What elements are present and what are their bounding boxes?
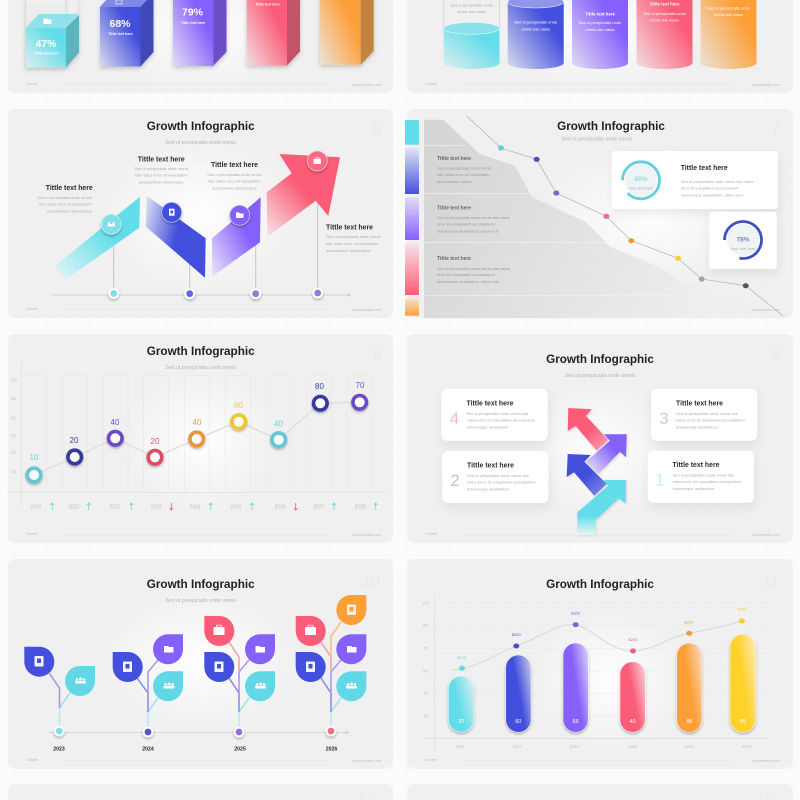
card 3: Tittle text here xyxy=(676,400,723,408)
arrow: blue xyxy=(567,454,607,496)
card 3: 3 xyxy=(659,409,669,428)
cylinder pink: Tittle text here xyxy=(650,2,680,6)
card 3 xyxy=(651,389,757,441)
cylinder orange: Sed ut perspiciatis unde xyxy=(707,6,751,10)
card 3: natus error sit voluptatem accusantium xyxy=(676,418,745,423)
pill values xyxy=(458,719,746,725)
arrow: pink xyxy=(568,408,608,451)
card 4: doloremque laudantium xyxy=(466,424,509,430)
year labels: 2021 xyxy=(68,504,80,510)
footer: Growth xyxy=(26,307,38,311)
text block 3: Tittle text here xyxy=(211,162,258,169)
y axis labels xyxy=(422,600,430,718)
trend line xyxy=(467,116,783,316)
slide number: 10 xyxy=(362,573,380,590)
icon badge: folder xyxy=(230,205,250,225)
cylinder orange xyxy=(700,0,756,69)
year 2024 leaves xyxy=(113,634,183,701)
y axis labels: 40 xyxy=(423,691,428,696)
ribbon: purple xyxy=(212,197,261,277)
text block 1: accusantium doloremque xyxy=(47,208,92,214)
text block 3 xyxy=(207,162,262,190)
footer xyxy=(26,758,381,763)
card 2: 2 xyxy=(450,471,460,490)
value labels: 80 xyxy=(315,382,324,391)
card 1 xyxy=(648,451,754,503)
heading: Growth Infographic xyxy=(557,120,665,133)
cube 68%: Tittle text here xyxy=(108,32,133,36)
year labels: 2025 xyxy=(234,746,246,752)
cube 79%: Tittle text here xyxy=(181,21,205,25)
arrow: purple xyxy=(586,434,627,474)
cube 47% xyxy=(26,0,79,68)
ribbon: teal xyxy=(55,197,140,280)
text block 4: Sed ut perspiciatis unde omnis xyxy=(326,234,380,239)
slide number: 7 xyxy=(772,122,781,139)
footer xyxy=(26,307,381,312)
year labels: 2020 xyxy=(30,504,41,510)
text block 4: iste natus error sit voluptatem xyxy=(326,241,379,246)
cube 47%: 47% xyxy=(35,38,57,50)
text block 1 xyxy=(37,185,93,214)
footer: Growth xyxy=(26,532,38,536)
year labels: 2021 xyxy=(628,744,638,749)
card 2: doloremque laudantium xyxy=(467,486,509,492)
text block 2: accusantium doloremque xyxy=(139,180,184,184)
text block 3: iste natus error sit voluptatem xyxy=(208,179,261,184)
footer: www.website.com xyxy=(751,759,780,763)
cylinder pink: omnis iste natus xyxy=(650,18,679,22)
icon badge: document xyxy=(162,202,182,222)
year labels xyxy=(30,504,366,510)
year labels xyxy=(53,746,337,752)
pill values: 60 xyxy=(515,719,521,725)
card: 88%: error sit voluptatem accusantium xyxy=(681,186,739,191)
subheading: Sed ut perspiciatis unde omnis xyxy=(565,373,636,379)
value labels: 20 xyxy=(70,436,79,445)
pill values: 40 xyxy=(630,719,636,725)
cylinder teal: omnis iste natus xyxy=(457,9,486,14)
text block 2 xyxy=(134,156,189,184)
step text 1: Tittle text here xyxy=(437,156,471,162)
footer xyxy=(425,532,780,537)
panel: slide 11 pill bar chart xyxy=(407,559,793,769)
card: 88%: Sed ut perspiciatis unde omnis iste natus xyxy=(681,179,753,184)
y axis labels: 100 xyxy=(10,378,18,382)
cube 68%: 68% xyxy=(109,18,131,30)
card 4: 4 xyxy=(450,409,459,428)
price labels xyxy=(457,606,747,660)
timeline dots xyxy=(108,288,323,299)
text block 2: iste natus error sit voluptatem xyxy=(135,173,188,178)
footer: www.website.com xyxy=(352,83,381,87)
card 1: Sed ut perspiciatis unde omnis iste xyxy=(672,472,735,478)
slide number: 8 xyxy=(373,347,382,364)
card 2: Tittle text here xyxy=(467,462,514,470)
y axis labels: 80 xyxy=(423,623,428,628)
timeline axis xyxy=(52,294,350,296)
cylinder pink xyxy=(636,0,692,69)
cube 68% xyxy=(100,0,154,66)
cylinder blue: omnis iste natus xyxy=(521,26,550,32)
value labels: 60 xyxy=(234,401,243,410)
panel: next slide left, cropped xyxy=(8,784,393,800)
footer: Growth xyxy=(425,758,437,762)
year labels: 2024 xyxy=(569,744,579,749)
arrow: pink xyxy=(267,154,340,237)
cube pink xyxy=(247,0,300,66)
card 2: Sed ut perspiciatis unde omnis iste xyxy=(467,473,530,478)
footer: Growth xyxy=(26,758,38,762)
card 1: doloremque laudantium xyxy=(672,486,715,491)
footer: www.website.com xyxy=(352,533,381,537)
timeline dots xyxy=(54,726,337,738)
card: 78%: Your text here xyxy=(731,246,756,251)
pill values: 30 xyxy=(458,719,464,725)
year labels: 2023 xyxy=(684,744,694,749)
cylinder purple: omnis iste natus xyxy=(586,27,614,32)
year labels: 2023 xyxy=(53,746,65,752)
icon badge: team xyxy=(101,214,121,234)
year labels: 2021 xyxy=(455,744,465,749)
value labels: 70 xyxy=(356,381,365,390)
card 1: Tittle text here xyxy=(672,462,720,469)
text block 1: iste natus error sit voluptatem xyxy=(39,202,92,207)
axes xyxy=(7,363,388,508)
year labels xyxy=(455,744,752,749)
card 4: Tittle text here xyxy=(466,400,514,408)
year labels: 2022 xyxy=(109,504,121,510)
text block 2: Tittle text here xyxy=(138,156,185,164)
cylinder orange: omnis iste natus xyxy=(714,12,743,17)
card 4: natus error sit voluptatem accusantium xyxy=(466,418,536,423)
subheading: Sed ut perspiciatis unde omnis xyxy=(165,140,236,146)
y axis labels: 40 xyxy=(11,433,16,438)
slide number: 9 xyxy=(772,347,781,364)
y axis labels: 60 xyxy=(423,668,428,674)
value labels: 40 xyxy=(274,420,283,428)
panel: next slide right, cropped xyxy=(407,784,793,800)
text block 4: Tittle text here xyxy=(326,224,373,232)
heading: Growth Infographic xyxy=(546,578,654,591)
heading: Growth Infographic xyxy=(546,353,654,366)
value labels: 20 xyxy=(151,437,160,446)
card: 78% xyxy=(709,212,777,269)
price labels: $300 xyxy=(571,610,581,616)
card 4: Sed ut perspiciatis unde omnis iste xyxy=(466,411,529,416)
footer: Growth xyxy=(26,82,38,86)
card: 88%: Your text here xyxy=(629,186,654,190)
year labels: 2022 xyxy=(512,744,522,749)
card: 88% xyxy=(612,151,778,209)
heading: Growth Infographic xyxy=(147,345,255,358)
footer xyxy=(26,532,381,537)
slide number: 6 xyxy=(373,122,382,139)
subheading: Sed ut perspiciatis unde omnis xyxy=(165,598,236,604)
pill values: 65 xyxy=(573,719,579,725)
colour bars xyxy=(405,120,419,316)
y axis labels: 80 xyxy=(11,396,16,401)
card 4 xyxy=(441,389,548,441)
icon badge: briefcase xyxy=(307,151,327,171)
panel: slide 9 arrow cards xyxy=(407,334,793,543)
year 2023 leaves xyxy=(24,647,95,696)
value labels: 40 xyxy=(193,418,202,427)
y axis labels xyxy=(10,378,18,474)
timeline axis xyxy=(49,731,348,734)
price labels: $100 xyxy=(457,655,467,660)
cube 79% xyxy=(173,0,226,66)
footer: Growth xyxy=(425,532,437,536)
text block 3: accusantium doloremque xyxy=(212,186,258,190)
value labels: 10 xyxy=(30,453,39,462)
year 2025 leaves xyxy=(204,616,275,701)
cube 47%: Tittle text here xyxy=(34,52,59,56)
y axis labels: 100 xyxy=(422,600,430,606)
card: 88%: Tittle text here xyxy=(681,165,728,172)
subheading: Sed ut perspiciatis unde omnis xyxy=(165,365,236,371)
price labels: $200 xyxy=(685,620,694,624)
trend dots xyxy=(459,618,745,671)
y axis labels: 20 xyxy=(11,450,16,455)
value labels xyxy=(30,381,365,462)
cylinder purple: Tittle text here xyxy=(585,12,616,16)
footer: www.website.com xyxy=(352,308,381,312)
footer xyxy=(425,82,780,87)
trend dots xyxy=(498,145,749,288)
stems xyxy=(114,200,318,290)
cylinder pink: Sed ut perspiciatis unde xyxy=(643,11,687,16)
step text 1: iste natus error sit voluptatem xyxy=(437,172,490,177)
value labels: 40 xyxy=(111,418,120,427)
year labels: 2026 xyxy=(326,746,337,752)
year labels: 2024 xyxy=(742,744,752,749)
cylinder blue xyxy=(508,0,564,69)
cylinder teal xyxy=(444,0,500,69)
heading: Growth Infographic xyxy=(147,120,255,133)
card 3: Sed ut perspiciatis unde omnis iste xyxy=(676,411,739,416)
gridlines and axes xyxy=(434,603,768,716)
year labels: 2028 xyxy=(354,504,366,510)
step text 2: doloremque laudantium, totam rem xyxy=(437,228,500,234)
trend arrows xyxy=(50,503,378,510)
panel: 3D cube bars xyxy=(8,0,393,93)
step text 1: Sed ut perspiciatis unde omnis xyxy=(437,166,491,170)
cube orange xyxy=(320,0,374,65)
step text 3: error sit voluptatem accusantium xyxy=(437,272,495,277)
cylinder purple: Sed ut perspiciatis unde xyxy=(579,20,622,25)
step text 3: Tittle text here xyxy=(437,256,471,262)
data points xyxy=(25,394,368,484)
card: 88%: doloremque laudantium, totam rem xyxy=(681,192,743,198)
y axis labels: 30 xyxy=(423,714,428,718)
line xyxy=(34,402,360,475)
step text 3 xyxy=(437,256,510,284)
cylinder purple xyxy=(572,0,628,69)
step text 3: doloremque laudantium, totam rem xyxy=(437,279,500,284)
trend line xyxy=(452,621,742,670)
grey stepped area xyxy=(424,120,783,318)
footer url: www.website.com xyxy=(751,308,780,312)
panel: slide 10 leaf timeline xyxy=(8,559,393,769)
step separators xyxy=(424,146,735,295)
card: 78%: 78% xyxy=(736,236,750,244)
panel: slide 8 line by year xyxy=(7,334,393,543)
card 1: 1 xyxy=(655,470,665,490)
text block 3: Sed ut perspiciatis unde omnis xyxy=(207,172,262,177)
step text 1: accusantium dolore xyxy=(437,179,472,184)
text block 4 xyxy=(326,224,380,253)
year labels: 2026 xyxy=(274,504,286,510)
pill values: 86 xyxy=(686,719,693,725)
pill values: 89 xyxy=(740,719,746,725)
cube 79%: 79% xyxy=(182,6,204,18)
cylinder teal: Sed ut perspiciatis unde xyxy=(450,2,494,8)
slide number: 11 xyxy=(763,573,779,590)
price labels: $200 xyxy=(629,637,638,642)
pills xyxy=(448,634,756,732)
card 3: doloremque laudantium xyxy=(676,424,718,430)
year labels: 2025 xyxy=(230,504,241,510)
cylinder blue: Sed ut perspiciatis unde xyxy=(514,20,558,24)
column guides xyxy=(22,376,372,493)
footer: www.website.com xyxy=(751,533,780,537)
footer: Growth xyxy=(425,82,437,86)
cube pink: Tittle text here xyxy=(255,2,280,6)
step text 1 xyxy=(437,156,491,184)
price labels: $200 xyxy=(512,632,522,637)
text block 1: Tittle text here xyxy=(46,185,93,192)
card: 88%: 88% xyxy=(634,176,648,183)
text block 4: accusantium doloremque xyxy=(326,248,371,253)
price labels: $400 xyxy=(738,606,747,612)
text block 2: Sed ut perspiciatis unde omnis xyxy=(134,166,189,171)
card 2: natus error sit voluptatem accusantium xyxy=(467,480,536,485)
panel: slide 7 descending steps xyxy=(405,109,793,318)
stems xyxy=(49,622,341,728)
footer xyxy=(425,758,780,763)
subheading: Sed ut perspiciatis unde omnis xyxy=(562,136,633,142)
panel: slide 6 arrow growth xyxy=(8,109,393,318)
step text 2: error sit voluptatem accusantium xyxy=(437,222,495,226)
y axis labels: 60 xyxy=(11,416,16,420)
year 2026 leaves xyxy=(296,595,366,701)
heading: Growth Infographic xyxy=(147,578,255,591)
card 1: natus error sit voluptatem accusantium xyxy=(672,479,742,484)
arrow: teal xyxy=(577,480,626,535)
step text 2: Sed ut perspiciatis unde omnis iste natus xyxy=(437,215,510,220)
text block 1: Sed ut perspiciatis unde omnis xyxy=(37,195,92,200)
step text 3: Sed ut perspiciatis unde omnis iste natus xyxy=(437,266,510,271)
footer: www.website.com xyxy=(352,759,381,763)
year labels: 2027 xyxy=(313,504,325,510)
footer: www.website.com xyxy=(751,83,780,87)
step text 2 xyxy=(437,206,510,234)
year labels: 2024 xyxy=(189,504,201,510)
ribbon: blue xyxy=(146,196,206,278)
step text 2: Tittle text here xyxy=(437,206,471,212)
year labels: 2024 xyxy=(142,746,154,752)
y axis labels: 10 xyxy=(11,469,16,474)
panel: cylinder bars xyxy=(407,0,793,93)
y axis labels: 70 xyxy=(423,646,428,651)
footer xyxy=(26,82,381,87)
card 2 xyxy=(442,451,548,503)
year labels: 2023 xyxy=(150,504,162,510)
